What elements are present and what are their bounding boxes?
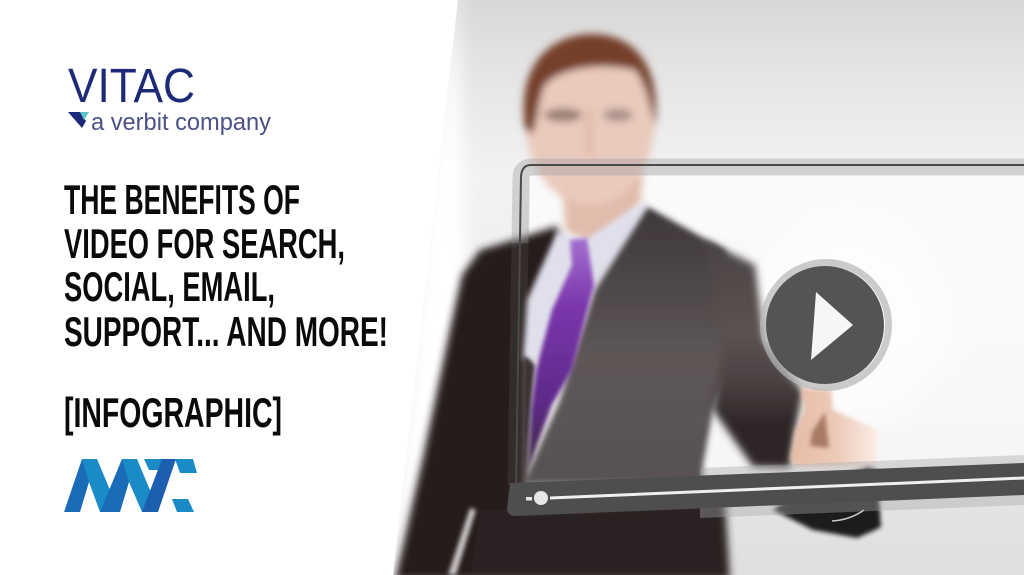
photo background	[390, 0, 1024, 575]
man's neck	[563, 175, 643, 250]
player control bar	[507, 455, 1024, 518]
title: THE BENEFITS OF	[64, 176, 300, 223]
panel: photo of businessman touching video screen	[385, 0, 1024, 575]
frame outer band	[520, 167, 1024, 243]
man's suit outside frame	[395, 226, 730, 575]
logo: MTC	[64, 459, 197, 512]
verbit mark	[68, 112, 89, 128]
bar body	[507, 463, 1024, 516]
play ring	[764, 262, 888, 388]
title: VIDEO FOR SEARCH,	[64, 220, 345, 267]
scrubber dash	[526, 497, 532, 500]
glow behind play button	[720, 190, 980, 450]
title: SOCIAL, EMAIL,	[64, 263, 275, 310]
scrubber knob	[534, 491, 548, 505]
shirt cuff sliver	[832, 510, 864, 521]
title: SUPPORT... AND MORE!	[64, 308, 388, 355]
jacket sliver highlight	[448, 508, 476, 575]
white shirt collar	[523, 200, 650, 360]
purple tie	[528, 238, 594, 470]
left chest shadow	[523, 355, 535, 480]
video frame outline	[516, 165, 1024, 490]
sleeve	[705, 240, 803, 468]
VITAC wordmark: VITAC	[68, 60, 195, 113]
play triangle	[811, 292, 853, 360]
tagline: a verbit company	[91, 109, 271, 136]
pointing hand	[790, 388, 878, 466]
man's head	[524, 34, 656, 205]
faint band over suit	[516, 243, 520, 485]
bar light edge	[700, 455, 1024, 518]
play disc	[766, 266, 884, 384]
title	[64, 176, 388, 436]
frame thin line	[516, 165, 1024, 490]
logo: VITAC a verbit company	[68, 60, 271, 136]
title: [INFOGRAPHIC]	[64, 389, 282, 436]
suit cuff	[773, 467, 881, 538]
play button	[764, 262, 888, 388]
white fade at slanted edge	[393, 8, 465, 575]
video frame glass tint over background	[530, 175, 1024, 483]
torso seen through glass	[525, 207, 735, 484]
progress line	[550, 476, 1024, 500]
